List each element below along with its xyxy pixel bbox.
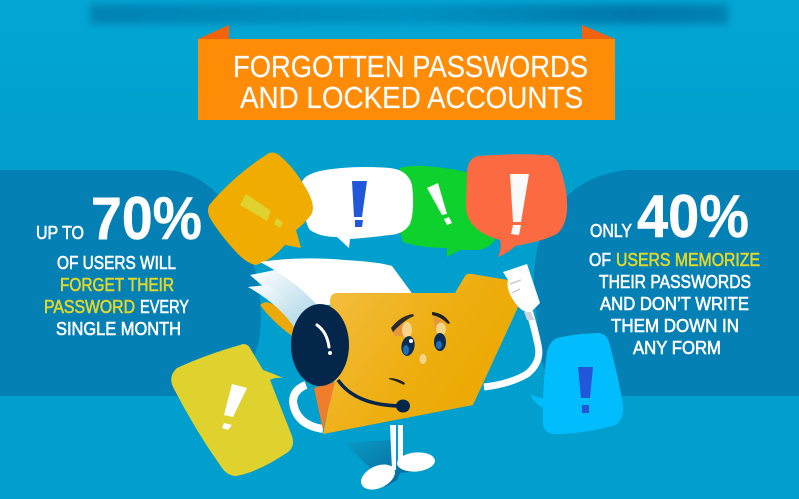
nose — [420, 354, 426, 364]
legs — [390, 425, 403, 470]
left statistic text: UP TO — [36, 223, 84, 243]
title: AND LOCKED ACCOUNTS — [240, 80, 583, 115]
right statistic text: THEM DOWN IN — [611, 316, 739, 336]
left statistic text: 70% — [91, 185, 202, 252]
hand — [503, 264, 540, 320]
panel: right statistic background — [534, 170, 799, 396]
headset ear cup — [291, 304, 349, 386]
left statistic text: OF USERS WILL — [57, 253, 176, 273]
right statistic text: THEIR PASSWORDS — [599, 272, 751, 292]
folder body — [323, 274, 519, 434]
mouth — [389, 378, 405, 385]
left arm — [293, 385, 323, 429]
left eye — [391, 314, 416, 357]
title: FORGOTTEN PASSWORDS — [233, 49, 588, 84]
left statistic text: SINGLE MONTH — [56, 319, 181, 339]
speech bubble: red — [466, 154, 567, 257]
title — [233, 49, 588, 115]
right arm — [484, 310, 539, 387]
right statistic text: OF — [589, 250, 611, 270]
page leaves — [248, 270, 325, 330]
speech bubble: white — [302, 167, 413, 248]
back cover — [260, 302, 300, 340]
feet — [357, 451, 436, 495]
banner left fold — [198, 25, 229, 39]
speech bubble: cyan — [530, 333, 623, 434]
right statistic text: ONLY — [590, 221, 632, 241]
right eye — [432, 312, 450, 351]
right statistic text: AND DON’T WRITE — [600, 294, 749, 314]
right statistic text: 40% — [637, 183, 749, 250]
banner right fold — [582, 25, 615, 39]
right statistic text: USERS MEMORIZE — [616, 250, 760, 270]
top shadow bar — [90, 4, 728, 24]
headset microphone — [338, 380, 410, 412]
speech bubble: orange — [208, 152, 313, 265]
left statistic text: EVERY — [140, 297, 189, 317]
banner title — [198, 25, 615, 120]
white sheet — [260, 258, 414, 306]
right statistic text — [589, 183, 760, 358]
character: folder mascot — [248, 258, 540, 495]
banner body — [198, 39, 615, 120]
panel: left statistic background — [0, 170, 261, 396]
left statistic text: PASSWORD — [44, 297, 135, 317]
left statistic text: FORGET THEIR — [60, 275, 174, 295]
right statistic text: ANY FORM — [633, 338, 721, 358]
folder fold — [314, 382, 335, 430]
left statistic text — [36, 185, 202, 339]
speech bubble: green — [396, 166, 495, 257]
shadow on floor — [345, 440, 427, 487]
speech bubble: yellow — [171, 344, 293, 476]
